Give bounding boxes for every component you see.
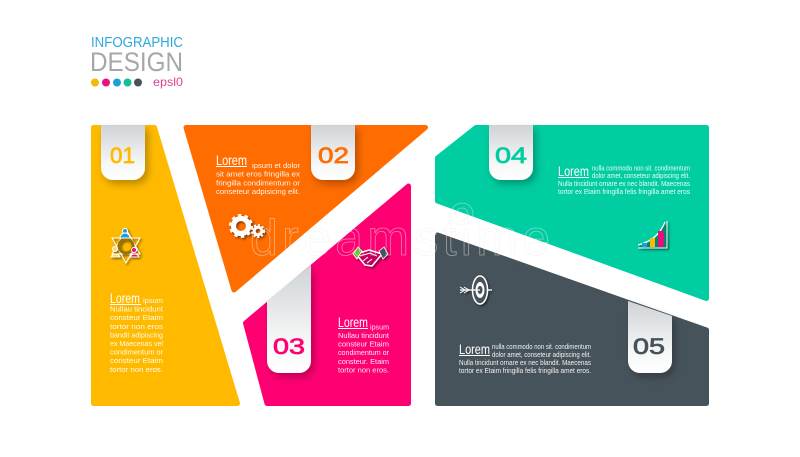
tab 04 <box>489 125 533 180</box>
panel shape 05 <box>438 235 706 404</box>
text block 04: nulla commodo non sit. condimentum <box>592 164 690 172</box>
text block 03: consteur. Etaim <box>338 357 389 366</box>
icon: growth chart <box>638 221 667 248</box>
watermark: dreamstime <box>250 210 550 266</box>
panel 04: green <box>438 125 706 298</box>
title block <box>90 35 183 89</box>
tab 03 <box>267 265 311 373</box>
tab 02: 02 <box>318 143 349 168</box>
heading: infographic: INFOGRAPHIC <box>91 35 183 51</box>
text block 02 <box>216 152 301 196</box>
panel shape 01 <box>94 128 238 404</box>
text block 02: Lorem <box>216 152 247 168</box>
text block 01 <box>110 290 164 374</box>
text block 05: nulla commodo non sit. condimentum <box>492 342 591 351</box>
text block 01: consteur Etaim <box>110 313 163 322</box>
text block 01: consteur Etaim <box>110 356 163 365</box>
colour dots <box>91 78 142 86</box>
text block 05: Nulla tincidunt ornare ex nec blandit. Maecenas <box>459 358 591 367</box>
tab 05 <box>628 301 672 373</box>
text block 03: ipsum <box>370 322 389 332</box>
text block 01: ex Maecenas vel <box>110 339 163 348</box>
panel 02: orange <box>186 125 426 290</box>
text block 02: ipsum et dolor <box>252 161 301 170</box>
text block 03: Nullau tincidunt <box>338 331 389 340</box>
text block 04: Lorem <box>558 163 589 179</box>
panel shape 04 <box>438 128 706 298</box>
panel 05: gray <box>438 235 706 404</box>
text block 03: consteur Etaim <box>338 340 389 348</box>
text block 02: conseteur adpisicing elit. <box>216 187 300 196</box>
text block 04 <box>558 163 690 196</box>
text block 03 <box>338 314 390 374</box>
text block 03: Lorem <box>338 314 368 330</box>
panel shape 02 <box>186 128 426 290</box>
icon: gears <box>230 216 264 237</box>
text block 02: sit amet eros fringilla ex <box>216 170 300 178</box>
text block 01: Nullau tincidunt <box>110 304 163 314</box>
heading: design: DESIGN <box>90 47 183 77</box>
tab 01: 01 <box>110 143 135 168</box>
text block 05: tortor ex Etaim fringilla felis fringilla amet eros. <box>459 366 591 375</box>
tab 04: 04 <box>495 143 527 168</box>
icon: handshake <box>353 247 388 266</box>
text block 01: tortor non eros. <box>110 365 163 374</box>
label: eps10: epsl0 <box>153 75 183 89</box>
panel shape 03 <box>246 186 408 404</box>
tab 05: 05 <box>633 334 665 359</box>
panel 03: pink <box>246 186 408 404</box>
text block 01: bandit adipiscing <box>110 330 163 340</box>
text block 04: dolor amet, conseteur adipiscing elit. <box>592 171 690 180</box>
text block 03: condimentum or <box>338 348 390 357</box>
text block 01: Lorem <box>110 290 140 306</box>
icon: target with arrow <box>460 276 492 304</box>
text block 04: Nulla tincidunt ornare ex nec blandit. Maecenas <box>558 179 690 188</box>
tab 01 <box>101 125 145 180</box>
icon: people network <box>111 228 140 263</box>
text block 05 <box>459 341 591 375</box>
text block 01: ipsum <box>143 296 163 305</box>
text block 01: tortor non eros <box>110 322 163 331</box>
panel 01: yellow <box>94 125 238 404</box>
tab 03: 03 <box>273 334 305 359</box>
text block 02: fringilla condimentum or <box>216 178 301 188</box>
tab 02 <box>311 125 355 180</box>
text block 05: Lorem <box>459 341 490 357</box>
text block 05: dolor amet, conseteur adipiscing elit. <box>492 350 591 359</box>
text block 01: condimentum or <box>110 348 164 356</box>
text block 03: tortor non eros. <box>338 366 389 374</box>
text block 04: tortor ex Etaim fringilla felis fringilla amet eros <box>558 187 690 196</box>
